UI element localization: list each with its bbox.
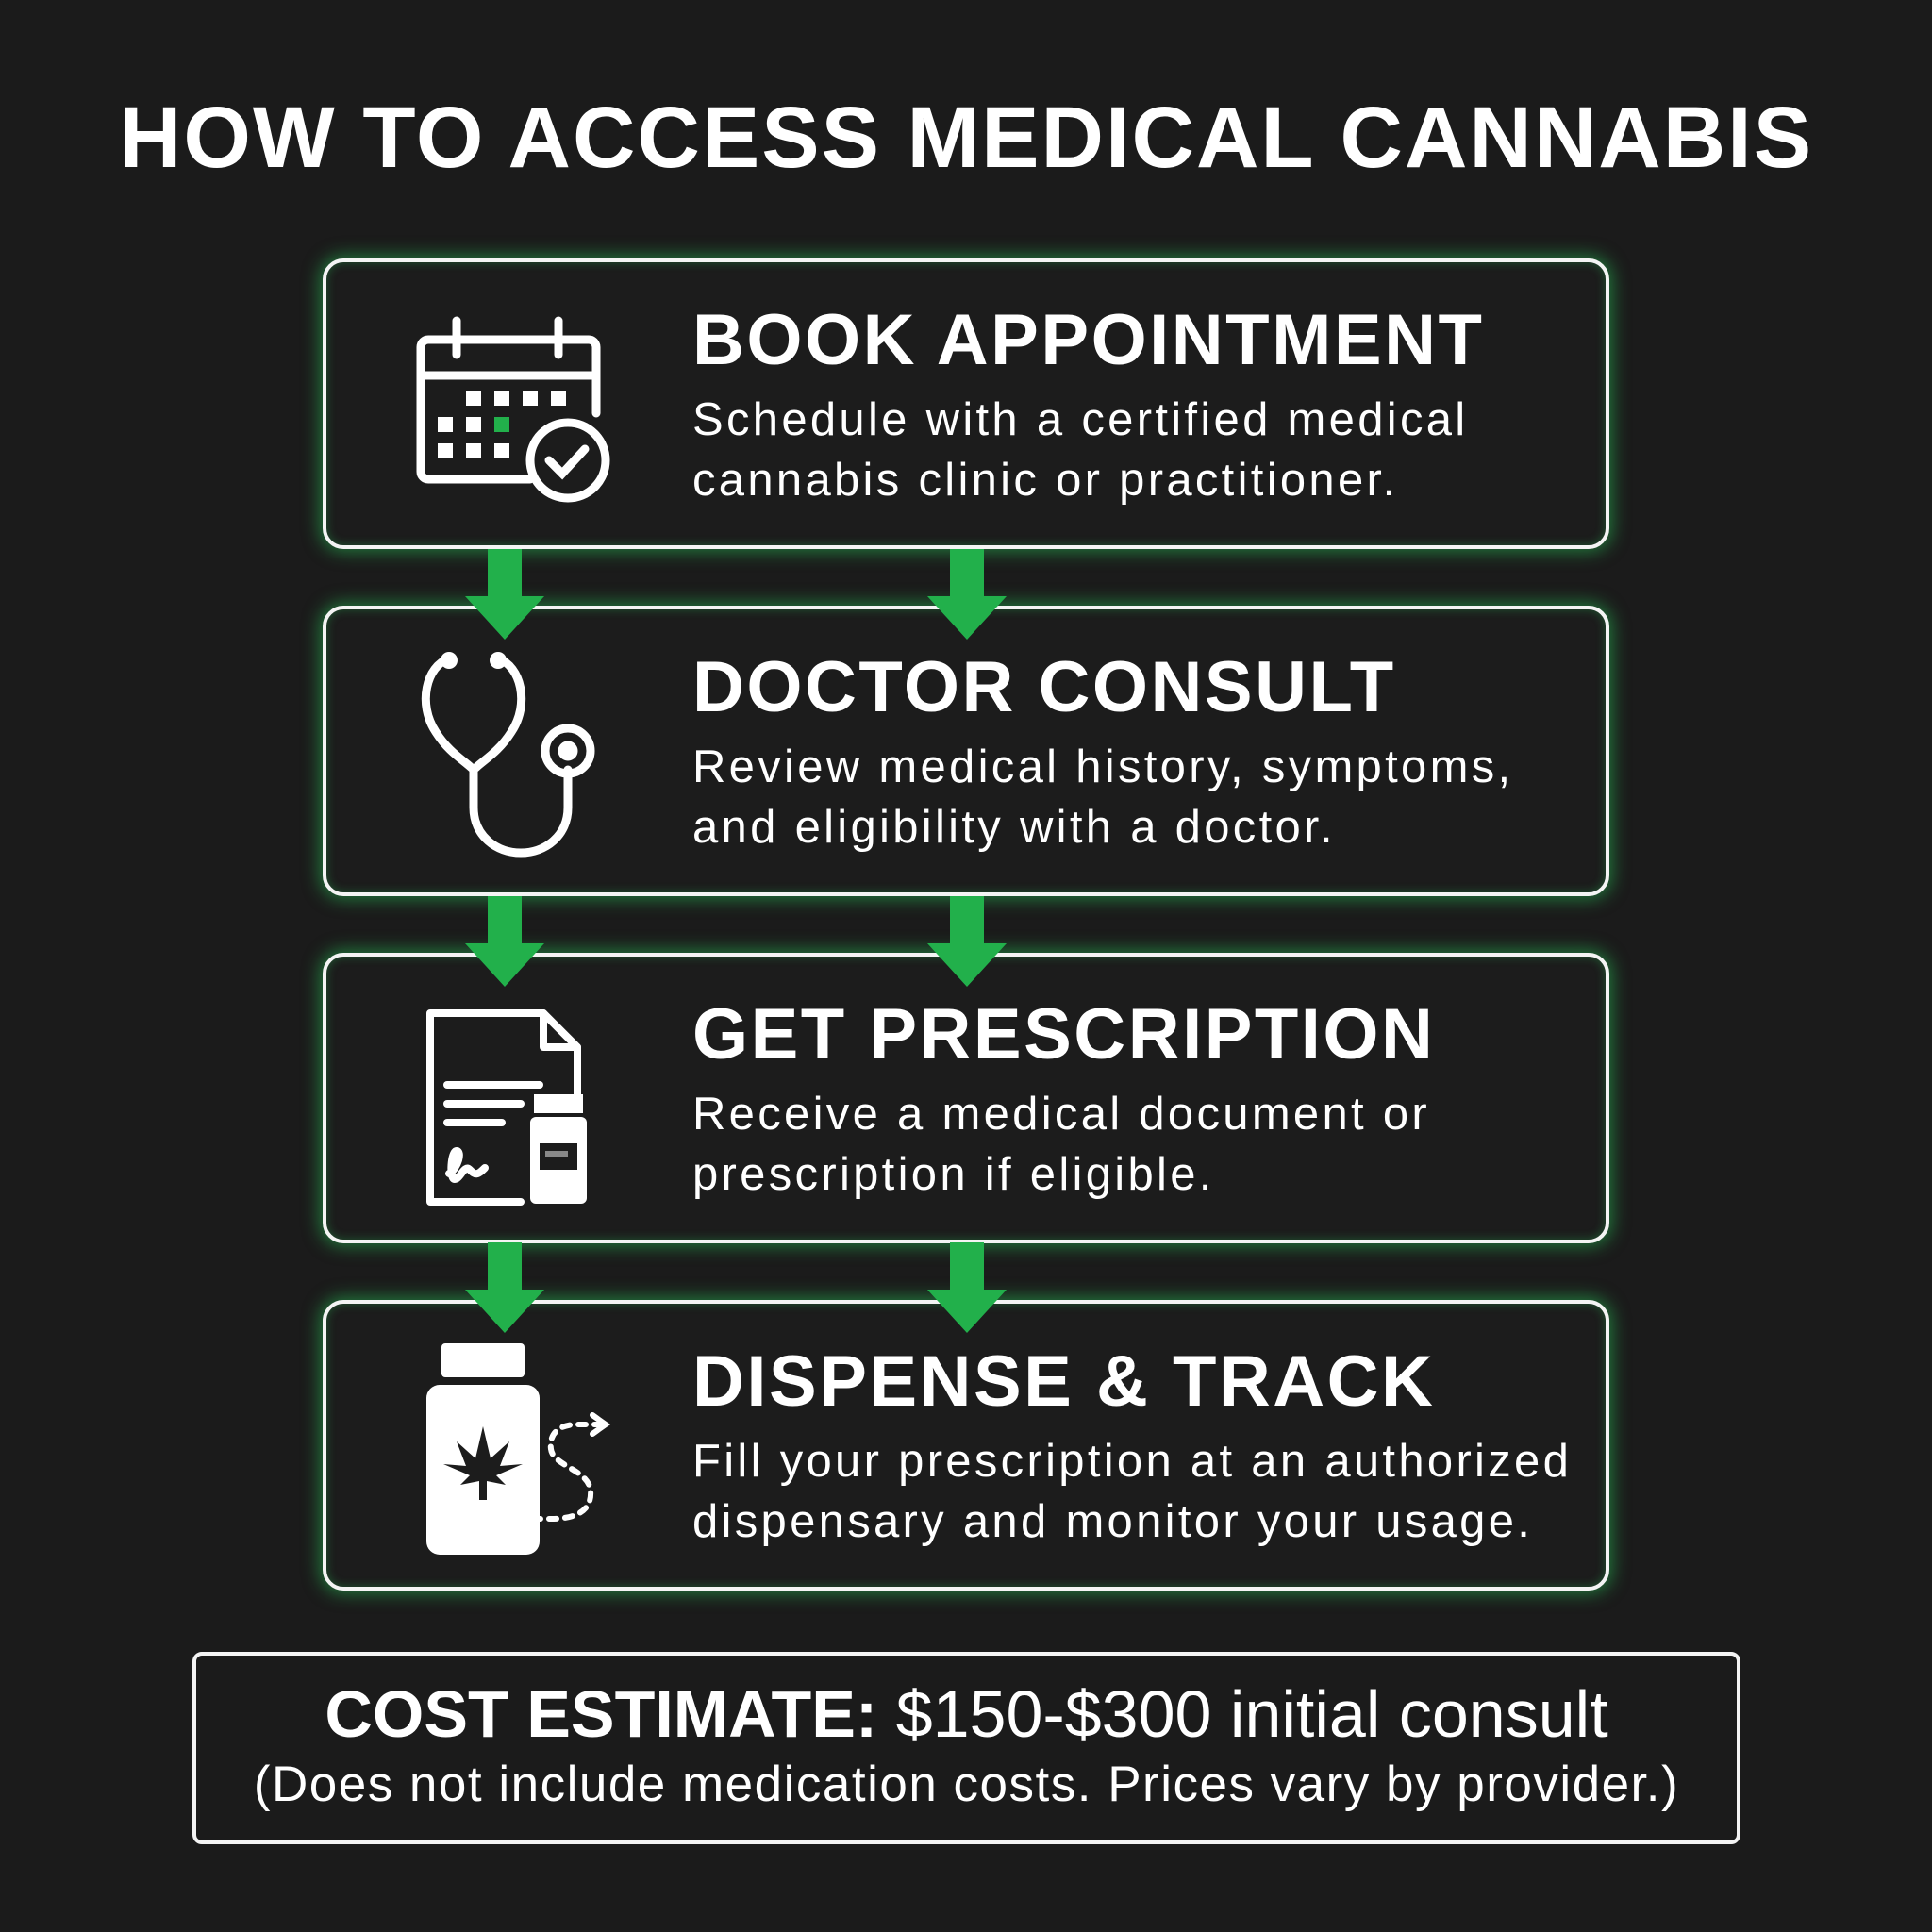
text: cannabis clinic or practitioner. [692,455,1398,506]
arrow: 2 to 3 left [465,896,544,987]
heading: DISPENSE & TRACK [692,1341,1435,1422]
icon: stethoscope [421,652,594,857]
arrow: 1 to 2 right [927,549,1007,640]
text [692,1436,1572,1547]
icon: pill bottle with cannabis leaf [426,1343,610,1555]
arrow: 1 to 2 left [465,549,544,640]
text: Schedule with a certified medical [692,394,1468,445]
cost note: (Does not include medication costs. Prices vary by provider.) [254,1757,1679,1812]
heading: GET PRESCRIPTION [692,994,1435,1074]
icon: prescription document [426,1009,587,1206]
heading: BOOK APPOINTMENT [692,300,1484,380]
text [692,1089,1430,1200]
heading: DOCTOR CONSULT [692,647,1396,727]
panel: dispense and track [323,1300,1609,1591]
arrow: 3 to 4 right [927,1242,1007,1333]
text: Fill your prescription at an authorized [692,1436,1572,1487]
panel: book appointment [323,258,1609,549]
callout: cost estimate [192,1652,1740,1844]
panel: get prescription [323,953,1609,1243]
text: Review medical history, symptoms, [692,741,1513,792]
text: Receive a medical document or [692,1089,1430,1140]
arrow: 2 to 3 right [927,896,1007,987]
panel: doctor consult [323,606,1609,896]
text: and eligibility with a doctor. [692,802,1336,853]
arrow: 3 to 4 left [465,1242,544,1333]
icon: calendar [417,317,609,502]
text [692,741,1513,853]
text: dispensary and monitor your usage. [692,1496,1533,1547]
title: HOW TO ACCESS MEDICAL CANNABIS [119,90,1813,186]
cost headline: COST ESTIMATE: $150-$300 initial consult [325,1677,1608,1751]
text: prescription if eligible. [692,1149,1215,1200]
text [692,394,1468,506]
